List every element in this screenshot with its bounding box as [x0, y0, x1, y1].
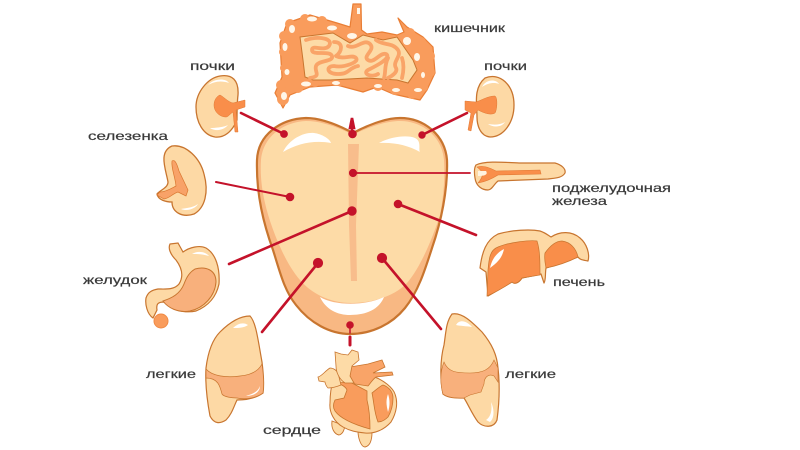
line: right lung — [378, 254, 441, 329]
label: spleen: селезенка — [88, 129, 168, 143]
intestine: inner coils — [300, 33, 417, 83]
label: pancreas — [552, 181, 671, 208]
tongue highlights — [283, 133, 420, 315]
heart: pulmonary trunk — [350, 360, 393, 386]
label: left kidneys: почки — [190, 59, 235, 73]
organ: stomach — [146, 243, 219, 328]
label: liver: печень — [553, 275, 605, 289]
line: pancreas — [350, 170, 470, 176]
label: heart: сердце — [263, 423, 321, 437]
heart: ventricles — [334, 382, 393, 429]
heart: feet — [332, 421, 372, 447]
organ: left kidney — [196, 76, 245, 137]
line: liver — [395, 201, 476, 235]
label: right lungs: легкие — [505, 367, 556, 381]
organ: left lung — [206, 316, 264, 423]
organ: intestine — [275, 4, 435, 108]
line: heart — [348, 322, 352, 345]
line: right kidney — [420, 113, 467, 137]
label: intestine: кишечник — [434, 21, 506, 35]
line: spleen — [216, 182, 293, 200]
label: right kidneys: почки — [484, 59, 527, 73]
heart: body — [330, 376, 397, 433]
heart: aorta — [335, 350, 359, 383]
organ: right kidney — [465, 77, 514, 137]
tongue median groove — [348, 144, 359, 281]
organ: liver — [480, 230, 589, 296]
label: pancreas: поджелудочная — [552, 181, 671, 195]
tongue — [257, 118, 447, 334]
line: left kidney — [241, 113, 287, 137]
connector lines — [216, 113, 476, 345]
organ: pancreas — [474, 162, 565, 190]
line: left lung — [262, 259, 322, 332]
organ: right lung — [441, 314, 499, 426]
line: intestine — [350, 118, 356, 137]
label: left lungs: легкие — [146, 367, 196, 381]
label: stomach: желудок — [83, 273, 148, 287]
heart: right atrium — [318, 368, 341, 388]
label: pancreas: железа — [552, 194, 607, 208]
organ: heart — [318, 350, 397, 447]
organ: spleen — [157, 146, 206, 215]
line: stomach — [229, 208, 355, 264]
intestine: highlights — [281, 8, 425, 100]
